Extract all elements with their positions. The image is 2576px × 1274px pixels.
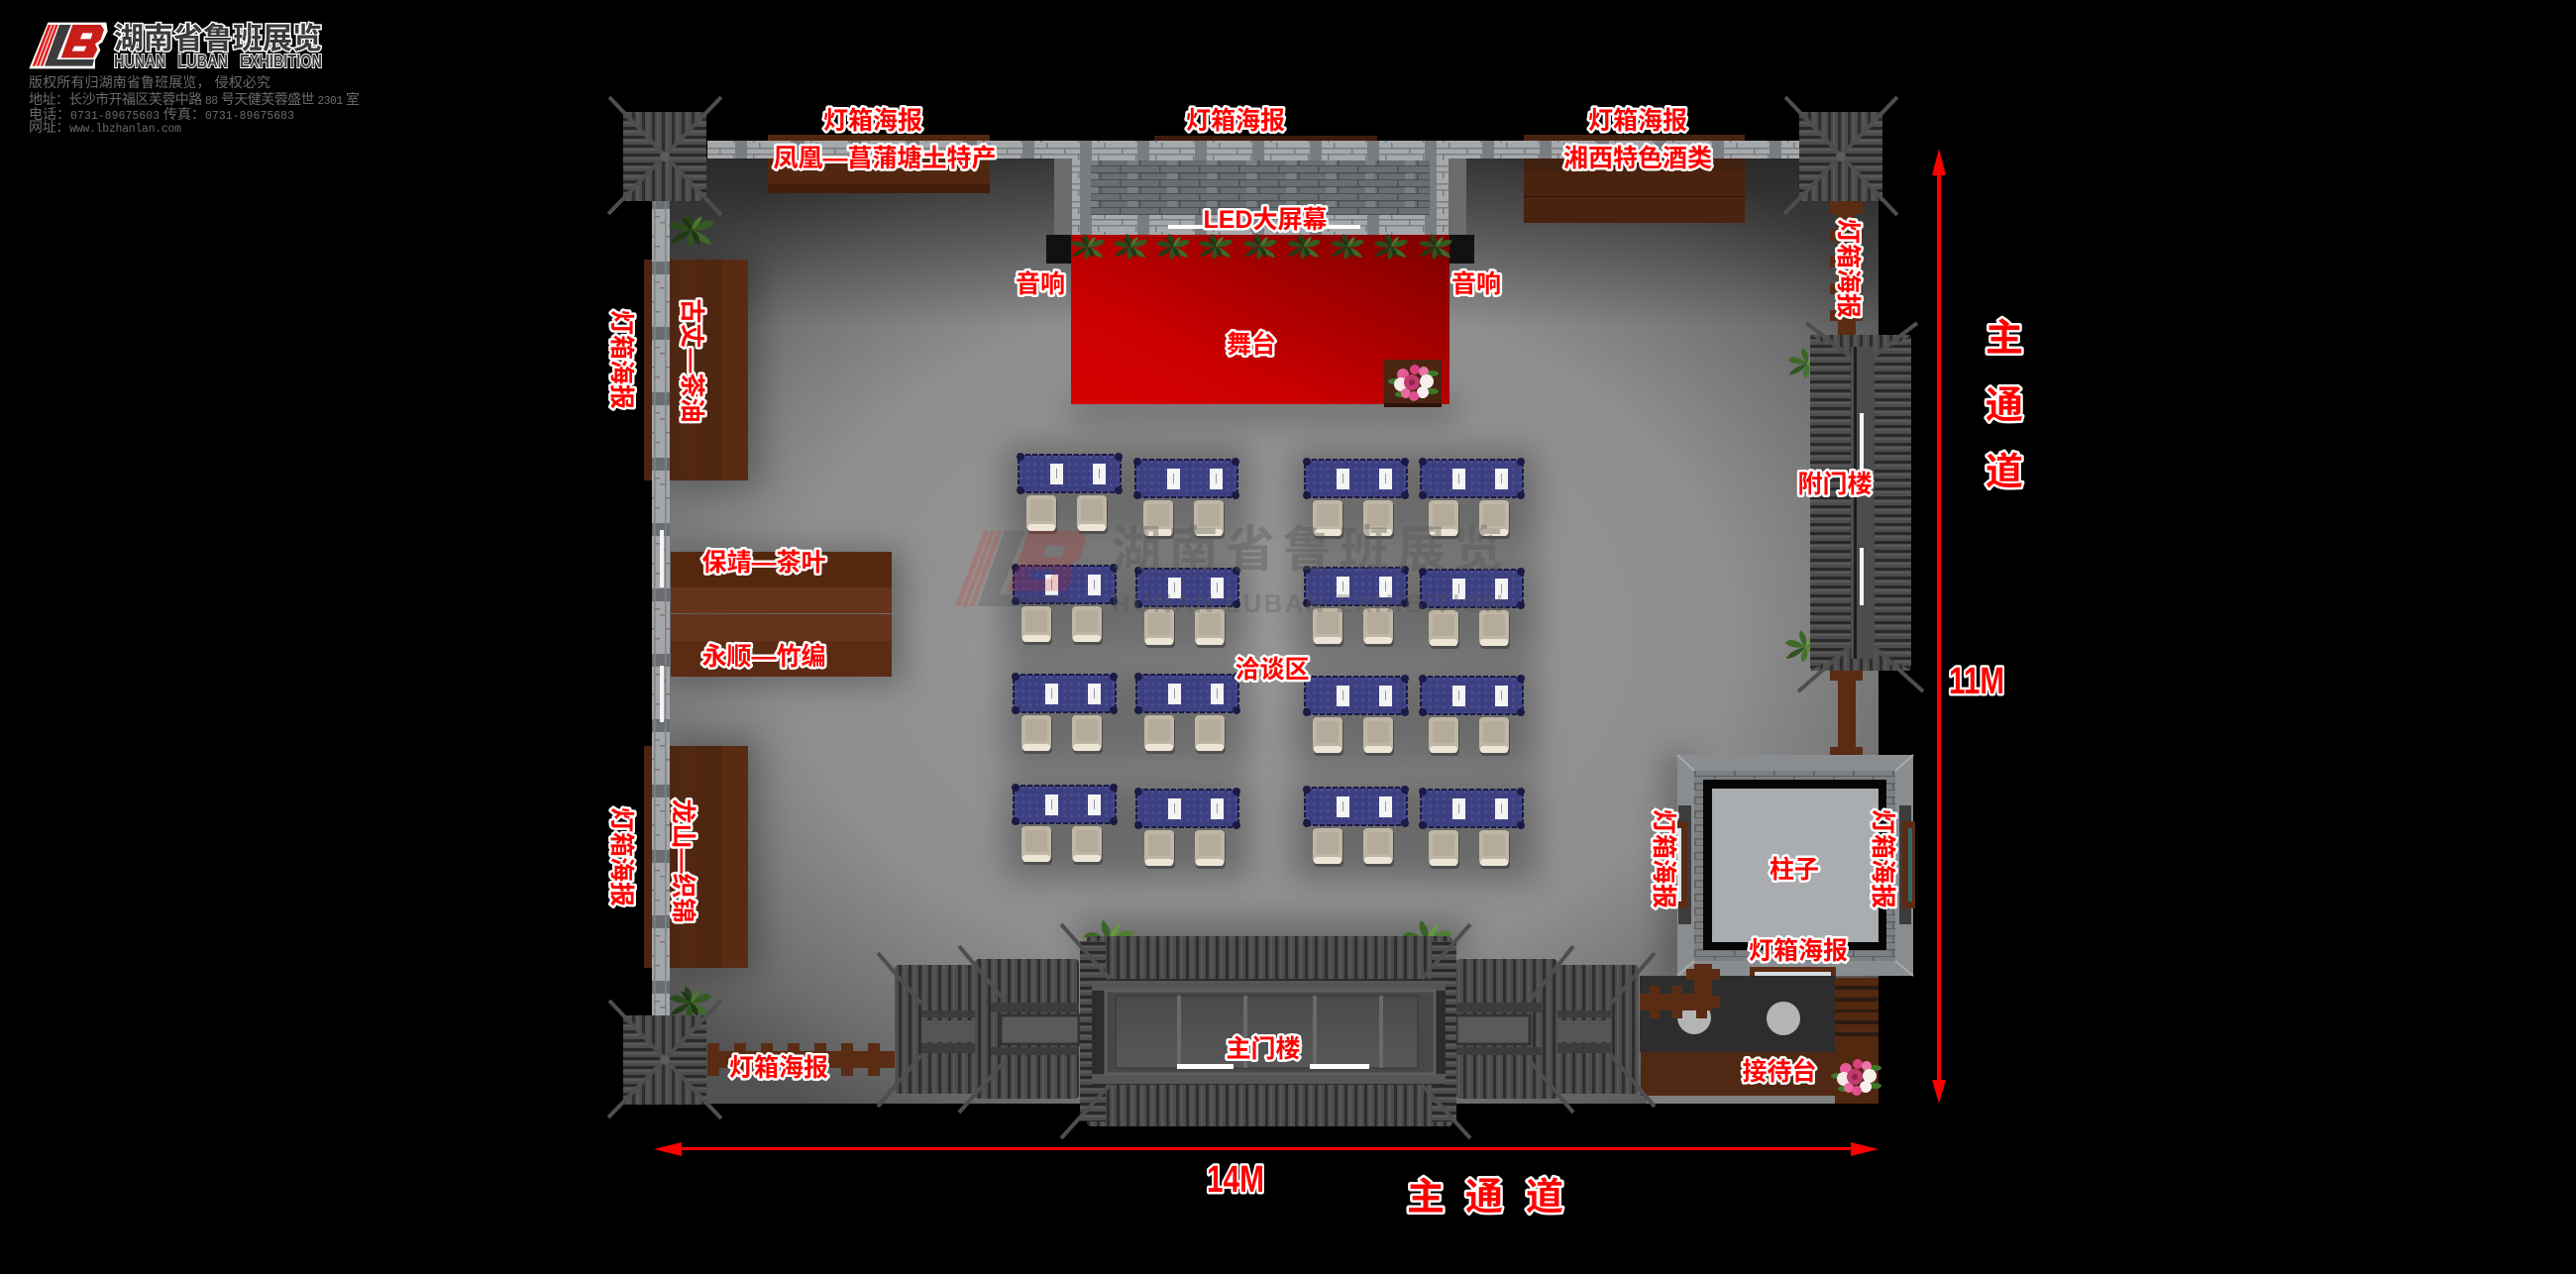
label: main aisle right: 道	[1986, 452, 2023, 493]
dimension arrow vertical	[1932, 149, 1946, 1104]
label: main aisle bottom	[1407, 1177, 1563, 1219]
floor plan	[608, 97, 1923, 1138]
stage flower pot	[1384, 360, 1442, 407]
label: reception: 接待台	[1742, 1057, 1817, 1086]
stage	[1071, 235, 1449, 404]
company name: 湖南省鲁班展览	[114, 23, 322, 55]
label: top poster 2: 灯箱海报	[1186, 107, 1285, 135]
label: speaker left: 音响	[1016, 270, 1065, 298]
pillar left light box	[1675, 805, 1691, 924]
label: right poster: 灯箱海报	[1834, 219, 1862, 318]
label: 凤凰: 凤凰—菖蒲塘土特产	[773, 144, 997, 172]
counter: 凤凰	[768, 135, 990, 193]
label: LED: LED大屏幕	[1203, 206, 1328, 234]
label: main gate: 主门楼	[1226, 1035, 1301, 1063]
soft shadows on floor	[670, 260, 1694, 981]
floor	[670, 159, 1878, 1104]
label: pillar poster left: 灯箱海报	[1650, 809, 1677, 908]
label: 湘西: 湘西特色酒类	[1563, 145, 1712, 172]
top wall	[707, 141, 1799, 159]
label: main aisle right	[1986, 318, 2023, 493]
pillar	[1675, 755, 1915, 979]
label: left poster upper: 灯箱海报	[607, 310, 635, 409]
phone: 电话：0731-89675603 传真：0731-89675683	[29, 106, 294, 123]
label: top poster 1: 灯箱海报	[823, 107, 922, 135]
label: pillar: 柱子	[1770, 856, 1819, 884]
tower bottom left	[608, 1001, 721, 1118]
LED screen wall	[1054, 141, 1466, 235]
outer left wing	[895, 965, 975, 1094]
label: negotiation area: 洽谈区	[1234, 656, 1310, 684]
speaker left	[1046, 235, 1071, 264]
left wall	[652, 201, 670, 1018]
copyright text: 版权所有归湖南省鲁班展览， 侵权必究	[29, 74, 270, 90]
reception desk	[1641, 1052, 1835, 1104]
stage plants	[1071, 234, 1452, 260]
pillar right light box	[1899, 805, 1915, 924]
counter: 湘西	[1524, 135, 1745, 223]
label: height 11M: 11M	[1949, 661, 2004, 702]
tower top right	[1784, 97, 1897, 215]
label: left poster lower: 灯箱海报	[607, 807, 635, 906]
row 4	[1012, 784, 1525, 869]
main gate tower	[878, 924, 1655, 1138]
speaker right	[1449, 235, 1474, 264]
logo and company information	[29, 23, 360, 136]
label: bottom poster: 灯箱海报	[729, 1054, 828, 1082]
counter: 龙山	[644, 746, 748, 968]
label: main aisle bottom: 通	[1465, 1177, 1503, 1219]
label: main aisle right: 主	[1986, 318, 2023, 360]
watermark English name: HUNAN LUBAN EXHIBITION	[1112, 588, 1503, 618]
corner plants	[669, 212, 1827, 1018]
address: 地址：长沙市开福区芙蓉中路 88 号天健芙蓉盛世 2301 室	[29, 91, 360, 108]
right wall beam	[1830, 201, 1863, 766]
reception area	[1640, 964, 1881, 1104]
website: 网址：www.lbzhanlan.com	[29, 119, 181, 136]
watermark name: 湖南省鲁班展览	[1112, 522, 1503, 578]
pillar bottom light box	[1750, 967, 1836, 979]
label: stage: 舞台	[1227, 330, 1276, 359]
watermark logo	[955, 531, 1086, 606]
label: side gate: 附门楼	[1797, 471, 1873, 498]
labels	[607, 107, 2023, 1219]
counter: 古丈	[644, 260, 748, 480]
bottom fence	[707, 1043, 895, 1076]
brown fence	[1640, 964, 1720, 1018]
side gate tower	[1798, 323, 1923, 691]
central roof	[1080, 936, 1456, 1126]
roof ridges	[878, 924, 1655, 1138]
label: width 14M: 14M	[1207, 1159, 1264, 1201]
label: 龙山: 龙山—织锦	[669, 798, 697, 923]
reception flowers	[1831, 1059, 1881, 1096]
row 1	[1017, 453, 1525, 539]
negotiation area tables and chairs	[1012, 453, 1525, 869]
tower top left	[608, 97, 721, 215]
label: main aisle bottom: 道	[1526, 1177, 1563, 1219]
LED wall top strip	[1154, 136, 1377, 142]
label: 永顺: 永顺—竹编	[701, 643, 826, 671]
inner left wing	[975, 959, 1079, 1099]
row 3	[1012, 673, 1525, 756]
logo mark	[29, 23, 108, 68]
company English name: HUNAN LUBAN EXHIBITION	[114, 52, 322, 71]
label: 古丈: 古丈—茶油	[678, 298, 705, 423]
label: top poster 3: 灯箱海报	[1588, 107, 1687, 135]
outer right wing	[1557, 965, 1639, 1094]
stool 1	[1677, 1001, 1711, 1034]
watermark	[955, 522, 1503, 618]
inner right wing	[1456, 959, 1557, 1099]
stool 2	[1767, 1002, 1800, 1035]
dimension arrow horizontal	[654, 1142, 1878, 1156]
row 2	[1012, 564, 1525, 649]
label: 保靖: 保靖—茶叶	[701, 549, 826, 577]
counter: 保靖 and 永顺	[671, 552, 892, 677]
label: pillar poster bottom: 灯箱海报	[1749, 937, 1848, 965]
steps and desk end	[1835, 978, 1878, 1104]
label: speaker right: 音响	[1451, 270, 1501, 298]
label: main aisle bottom: 主	[1407, 1177, 1445, 1219]
label: main aisle right: 通	[1986, 385, 2023, 427]
label: pillar poster right: 灯箱海报	[1869, 809, 1896, 908]
